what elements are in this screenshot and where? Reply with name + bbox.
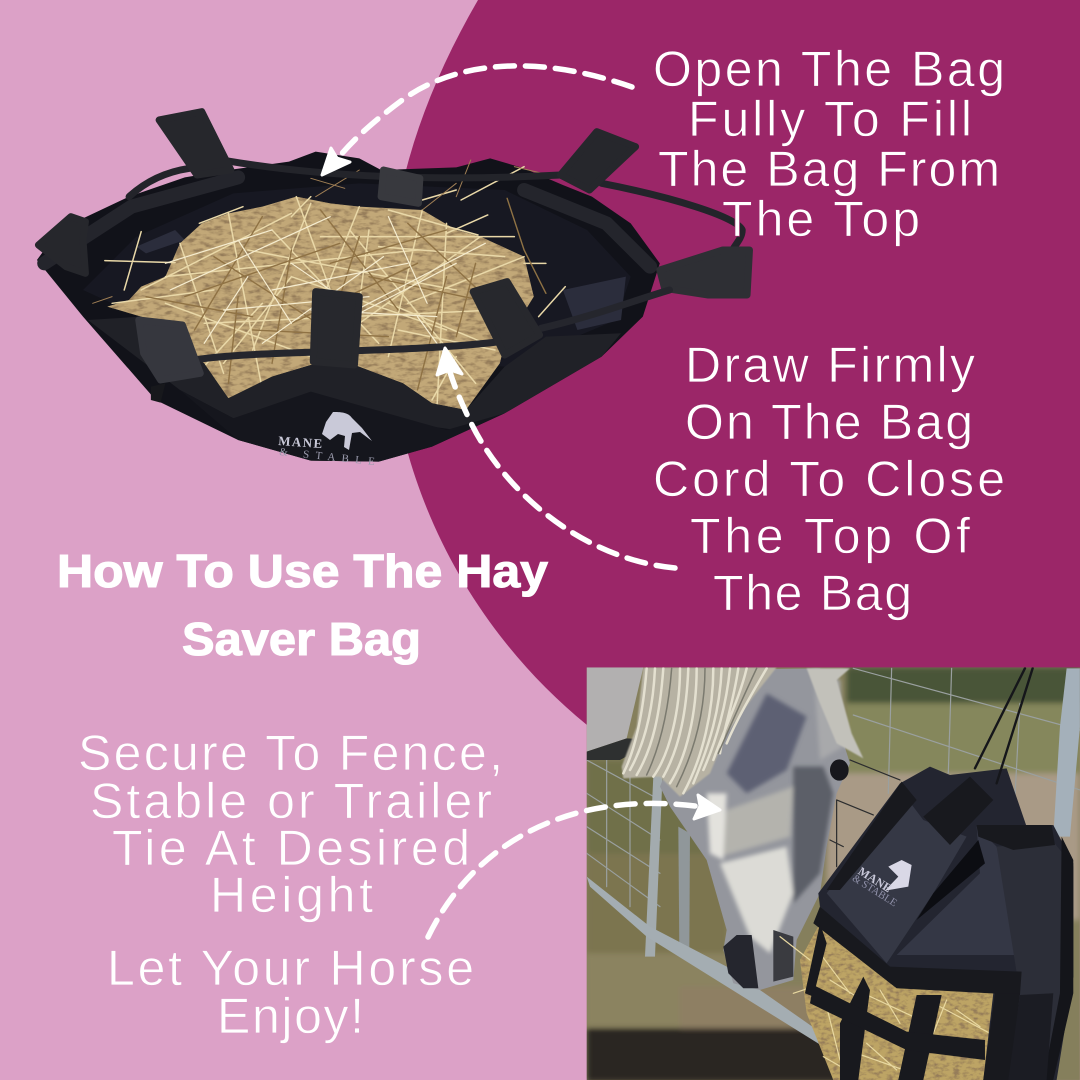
logo wordmark: MANE [278,433,323,451]
horse neck [587,667,643,752]
text: step 3 secure: Stable or Trailer [90,773,492,829]
text: step 4 enjoy: Let Your Horse [107,940,474,996]
text: step 2 draw the cord: The Top Of [690,508,970,564]
rope drawcord back [129,161,742,250]
bag side panel highlight [897,827,1020,955]
bag logo [850,860,912,909]
handle: top right [560,132,636,190]
text: step 2 draw the cord: The Bag [713,565,912,621]
text: step 3 secure: Secure To Fence, [78,725,503,781]
horse forelock [807,668,863,758]
text: step 1 open the bag: Fully To Fill [688,91,972,147]
text: step 1 open the bag: Open The Bag [653,41,1005,97]
arrow: to horse [428,795,720,937]
bag dark side seam [1043,837,1073,1080]
handle: front right [473,282,540,355]
hay strands [780,937,990,1073]
horse muzzle [723,935,758,988]
hanging cords [975,668,1033,783]
bag front lower panel [180,390,505,462]
text: step 2 draw the cord [653,337,1005,621]
small toggle [151,383,165,403]
text: step 1 open the bag [653,41,1005,247]
bag lower dark panel [1008,993,1053,1080]
bag right gusset [997,844,1074,1046]
title [57,545,548,665]
blurred scenery [587,667,1080,1080]
text: step 4 enjoy: Enjoy! [217,988,364,1044]
text: step 4 enjoy [107,940,474,1044]
text: step 2 draw the cord: Draw Firmly [685,337,975,393]
arrowhead [694,795,720,819]
title: Saver Bag [182,613,421,665]
text: step 3 secure [78,725,503,923]
fence post: left [645,776,662,957]
bag front wave hem [88,317,621,430]
horse eye [830,759,849,781]
hanging bag body [818,767,1073,1080]
bag inner lining [83,183,631,390]
logo wordmark [278,433,376,468]
bag logo: MANE [856,864,894,895]
text: step 2 draw the cord: On The Bag [685,394,973,450]
text: step 3 secure: Height [210,867,373,923]
handle: right [660,250,749,295]
text: step 1 open the bag: The Bag From [658,141,1000,197]
fence post: centre [678,827,690,950]
background: purple curved panel [388,0,1080,725]
bag dark opening [917,840,985,920]
fence wires [587,668,1080,907]
title: How To Use The Hay [57,545,548,597]
handle: front left [139,320,200,380]
bag front panel highlight [827,793,967,963]
handle: front centre [313,292,359,365]
text: step 2 draw the cord: Cord To Close [653,451,1005,507]
horse face shadow and highlights [707,668,843,953]
handle: top centre [381,170,420,203]
lining shine [136,230,626,330]
dark under neck [586,738,633,760]
photo background [587,667,1080,1080]
dark fence wires near bag [830,760,900,867]
horse mane [622,667,777,797]
handle: left [38,217,85,273]
horse head [660,668,850,990]
arrow: to top of bag [322,66,632,175]
bag body [37,152,660,462]
arrow: to bag cord [437,348,675,568]
photo: horse eating from hanging bag [587,667,1080,1080]
hay in net [800,923,995,1080]
rim webbing band [44,177,650,267]
photo: bag filled with hay [37,112,749,462]
fence post: right [1053,668,1080,837]
handle: top left [159,112,231,175]
gate rail [587,877,827,1047]
bag logo: & STABLE [850,873,899,909]
text: step 3 secure: Tie At Desired [112,820,470,876]
hay pile [107,197,534,410]
arrowhead [322,148,350,175]
text: step 1 open the bag: The Top [722,191,920,247]
hay strands [93,160,565,410]
bag straps [805,777,1055,1080]
rope drawcord front [194,290,669,360]
logo: Mane & Stable on bag [278,412,376,468]
logo wordmark: & STABLE [279,446,376,468]
horse mouth [773,930,793,982]
logo horse icon [322,412,372,450]
arrowhead [437,348,462,375]
logo horse [885,860,912,891]
